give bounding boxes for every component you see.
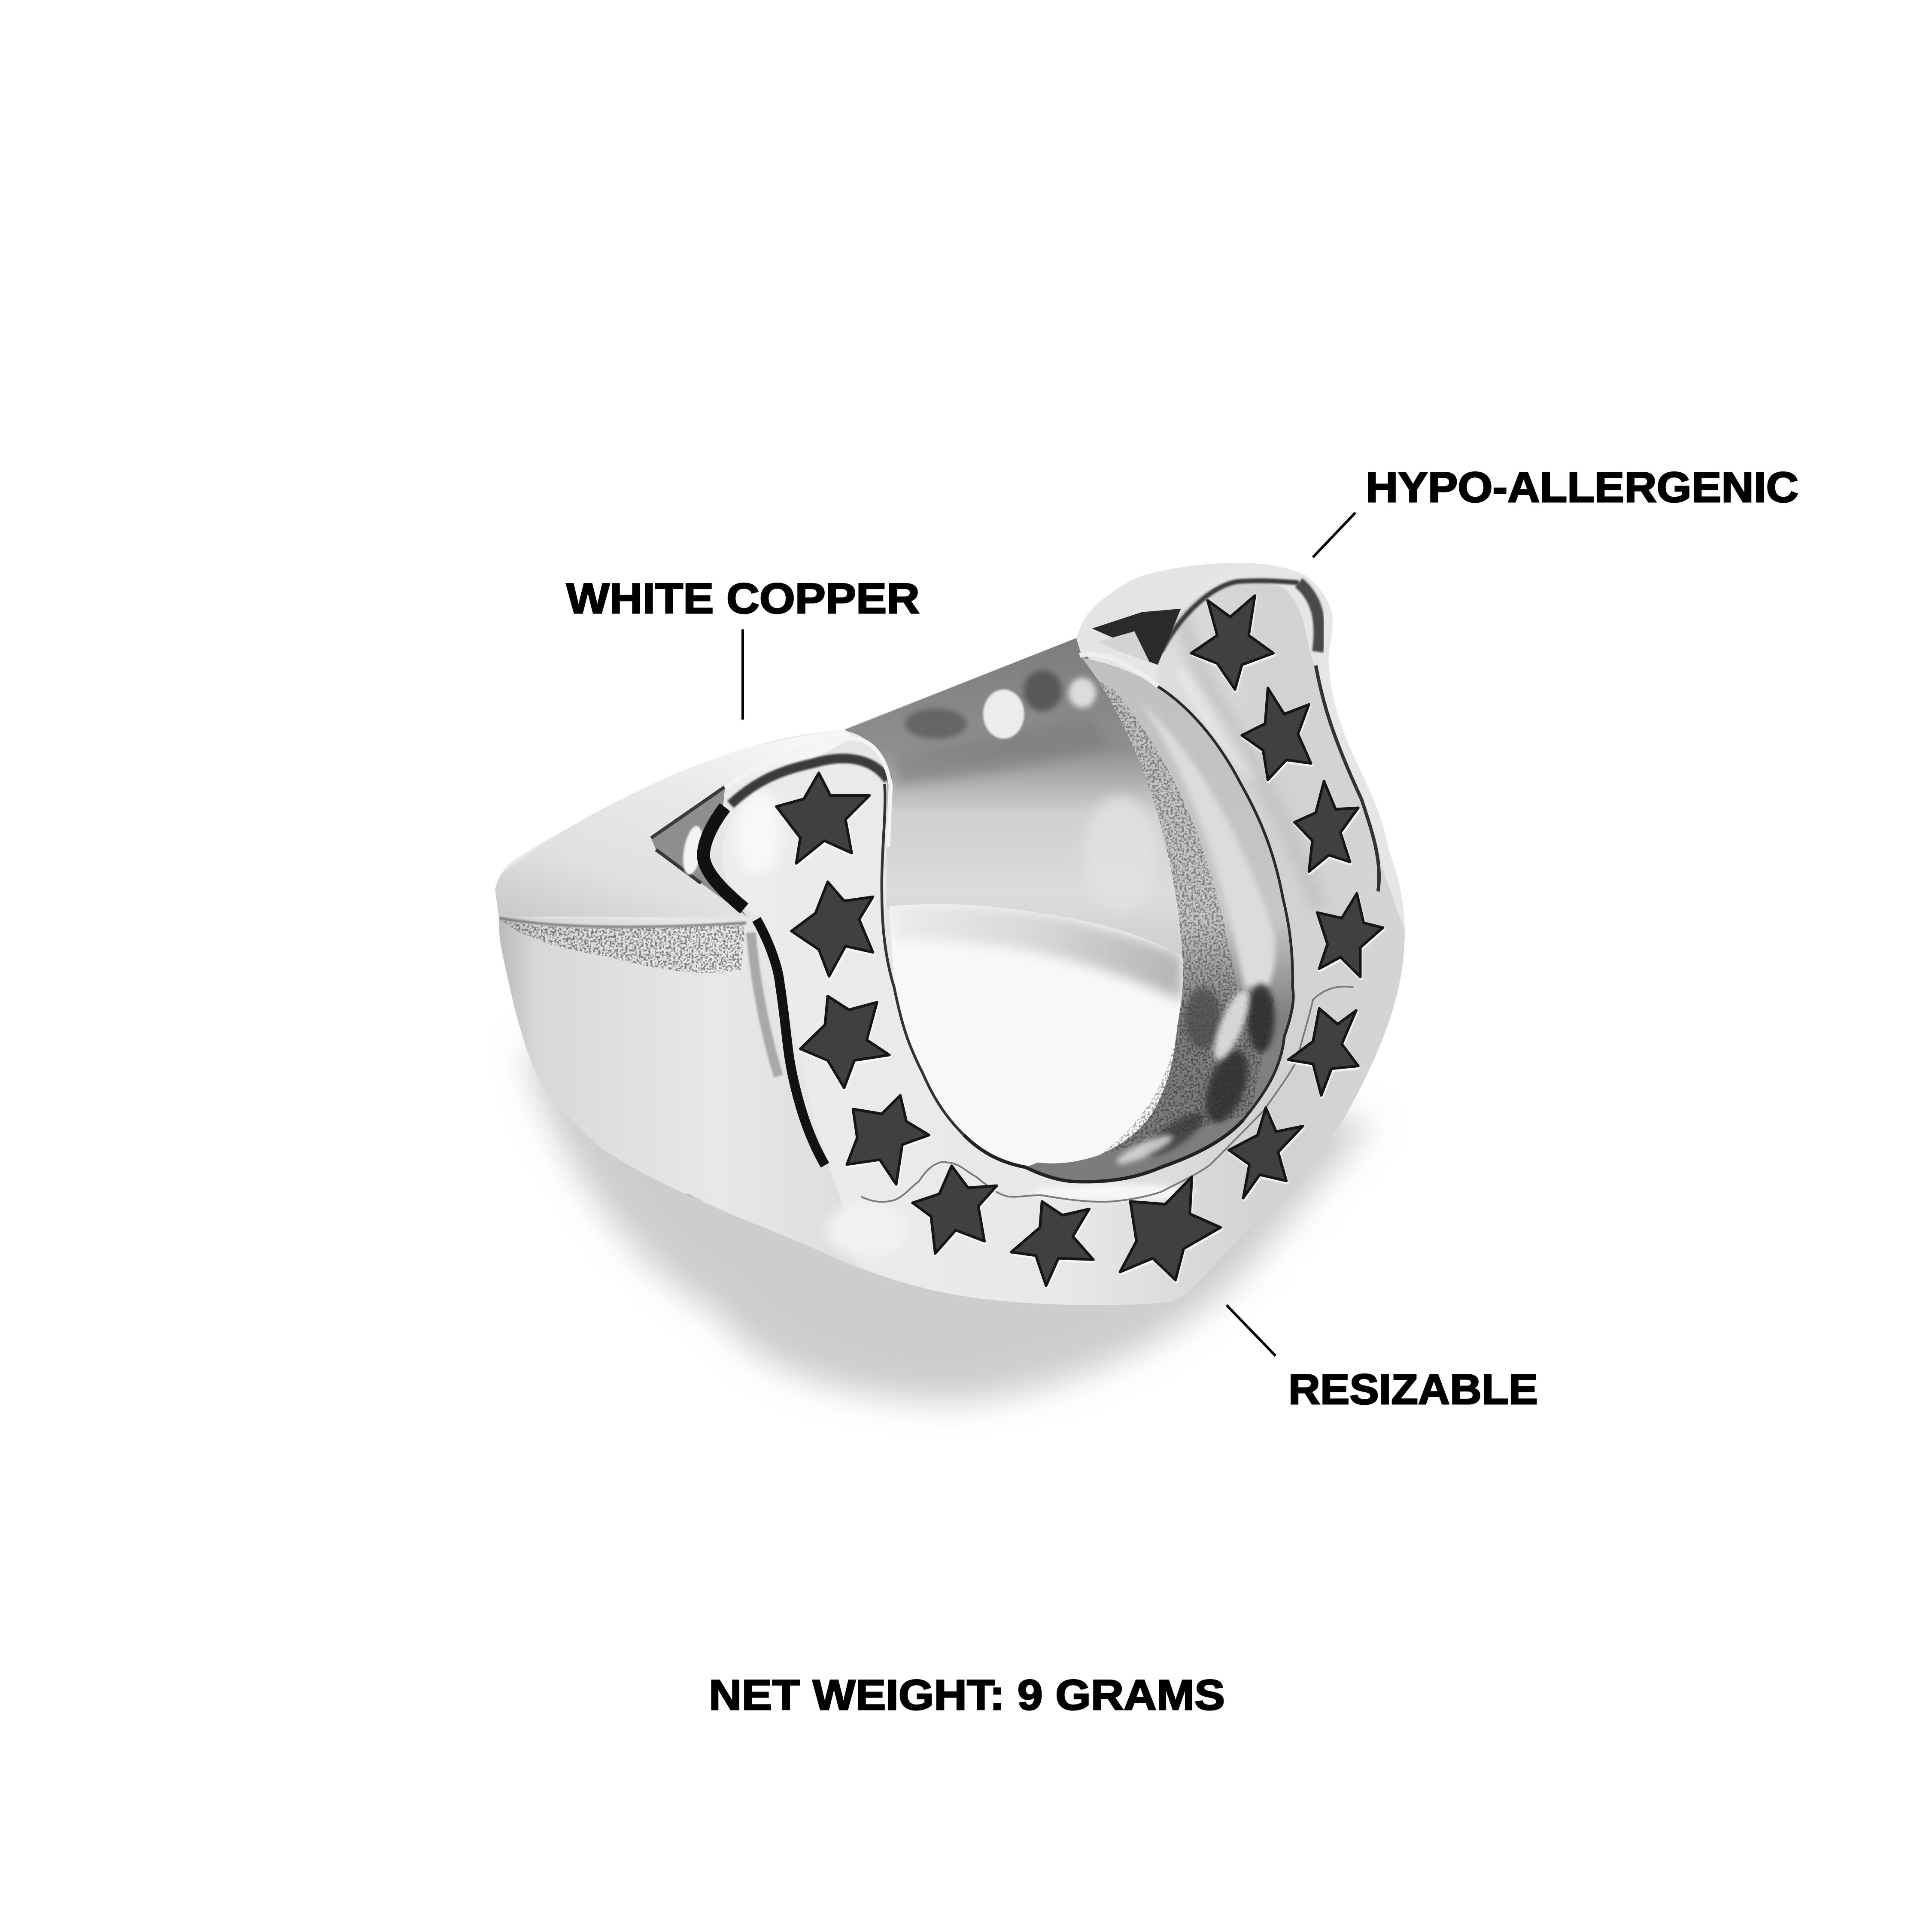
star 5: [913, 1166, 997, 1254]
leader line: white copper: [741, 629, 744, 720]
dark recess: [1092, 609, 1181, 665]
star 3: [800, 996, 889, 1088]
star 4: [847, 1095, 929, 1185]
upper black groove: [704, 807, 744, 908]
lower facet: [491, 917, 867, 1319]
polished lower edge: [686, 1196, 792, 1244]
right arm dark groove: [1299, 583, 1319, 652]
inner edge of the U: [882, 784, 964, 1135]
right arm metal shading: [1182, 617, 1319, 908]
label: net weight: NET WEIGHT: 9 GRAMS: [709, 1671, 1225, 1719]
brushed grain strip: [501, 921, 746, 973]
smooth bright step of the wall: [1141, 703, 1275, 987]
star 12: [1242, 688, 1311, 780]
right inner edge of the U: [1155, 685, 1293, 1120]
face plate grooves and edges: [704, 581, 1379, 1202]
light sliver in recess: [1099, 631, 1149, 662]
label: resizable: RESIZABLE: [1288, 1365, 1538, 1413]
right arm edge line: [1316, 665, 1379, 891]
dark mottled patches: [1247, 984, 1275, 1052]
hole reflection shadow: [889, 904, 1182, 1001]
leader line: resizable: [1227, 1305, 1276, 1356]
ring photograph: [491, 563, 1405, 1401]
inner back of the band: [843, 638, 1182, 957]
face highlights: [735, 662, 1264, 1258]
star 7: [1120, 1177, 1221, 1280]
upper facet: [491, 728, 854, 917]
lower inner edge of the U: [964, 1120, 1243, 1182]
speckled texture on the wall: [1099, 681, 1275, 1155]
inner rim: [1080, 654, 1158, 686]
star 6: [1011, 1201, 1094, 1286]
label: hypo-allergenic: HYPO-ALLERGENIC: [1366, 463, 1798, 511]
lower black groove: [756, 920, 825, 1165]
bright rim over the left arm: [725, 738, 891, 847]
label: white copper: WHITE COPPER: [566, 574, 920, 622]
band outer facets: [495, 729, 857, 1267]
star 13: [1191, 595, 1273, 690]
soft cast shadow: [525, 1045, 1374, 1401]
groove recess triangle: [651, 787, 746, 916]
top right cap: [1076, 564, 1240, 686]
inner wall of the horseshoe: [1026, 658, 1293, 1182]
leader line: hypo-allergenic: [1313, 513, 1355, 557]
dark band over the left arm: [731, 759, 888, 805]
thirteen recessed stars: [776, 595, 1383, 1286]
groove bright reflection: [680, 824, 706, 876]
scalloped step line: [861, 987, 1353, 1202]
grey sliver beside the groove: [751, 933, 778, 1076]
star 10: [1317, 893, 1383, 977]
star 11: [1294, 781, 1358, 872]
star 9: [1288, 1009, 1358, 1095]
finger hole: [890, 904, 1183, 1166]
star 1: [776, 773, 869, 863]
infographic canvas: [495, 471, 1798, 1710]
facet crease line: [499, 918, 746, 927]
ring silhouette: [495, 563, 1405, 1305]
star 8: [1229, 1108, 1303, 1198]
horseshoe face plate: [722, 581, 1405, 1305]
right arm top edge: [1161, 581, 1299, 652]
star 2: [791, 882, 873, 976]
